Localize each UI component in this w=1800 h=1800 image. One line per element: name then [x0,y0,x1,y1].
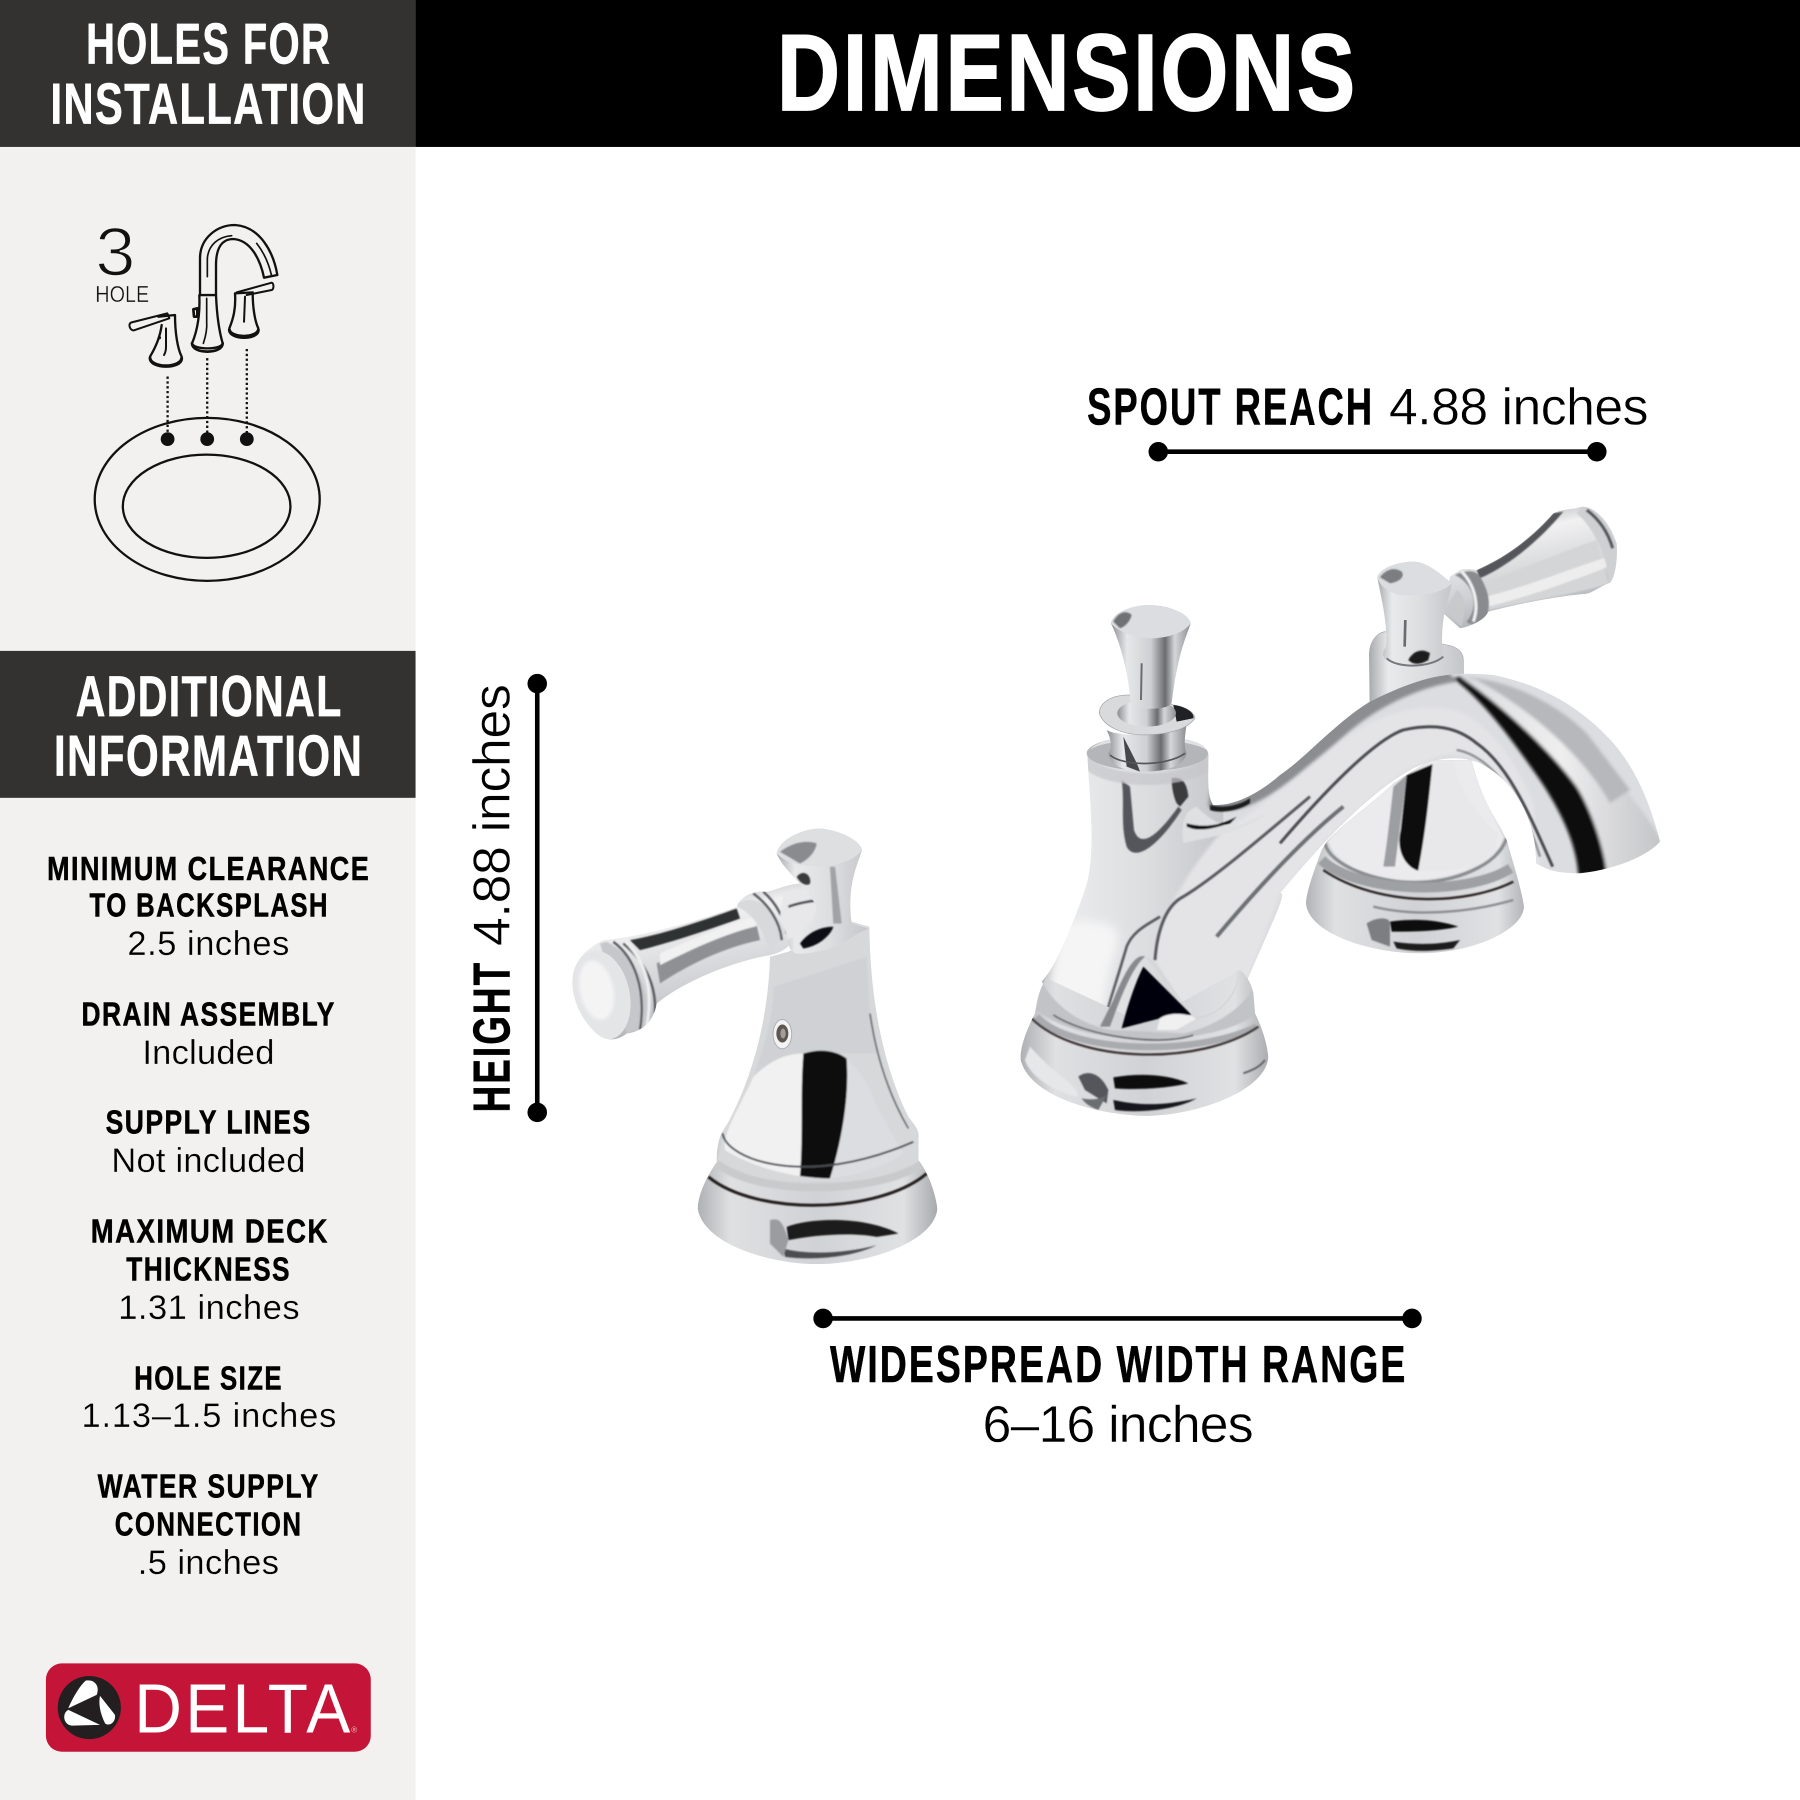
dimension: widespread width range: 6–16 inches [983,1395,1254,1453]
spec: water supply connection: CONNECTION [115,1506,302,1543]
logo: delta [46,1663,371,1752]
back handle block, cap and lever [1369,503,1620,703]
front handle body and base [693,920,940,1267]
spec: water supply connection [98,1469,320,1582]
spec: drain assembly: DRAIN ASSEMBLY [82,997,336,1034]
faucet: center base [1017,956,1273,1120]
faucet: back handle [1300,503,1620,960]
spec: minimum clearance: 2.5 inches [127,925,289,963]
dimension: spout reach: SPOUT REACH [1087,378,1374,436]
dimension: widespread width range [813,1309,1422,1453]
spec: minimum clearance: TO BACKSPLASH [90,888,329,925]
back handle base and bell [1306,760,1524,954]
main title: dimensions [416,0,1800,147]
lower cone [1107,723,1187,772]
dimension: height: 4.88 inches [463,684,521,946]
spec: drain assembly: Included [142,1034,274,1072]
logo: delta: ® [351,1725,357,1734]
spec: hole size: 1.13–1.5 inches [82,1397,336,1435]
heading: holes for installation: HOLES FOR [86,13,331,77]
heading: additional information [0,651,416,798]
dimension: height [463,674,547,1122]
spec: maximum deck thickness: 1.31 inches [118,1289,300,1327]
dark triangle reflection [1100,956,1197,1030]
spec: hole size: HOLE SIZE [134,1361,283,1398]
faucet: center spout [1037,605,1670,1043]
flange [1099,695,1195,735]
faucet: front handle [565,828,940,1267]
spec: supply lines: Not included [111,1142,305,1180]
heading: holes for installation: INSTALLATION [51,72,367,136]
spec: maximum deck thickness: THICKNESS [126,1252,291,1289]
spec: water supply connection: .5 inches [138,1544,279,1582]
heading: holes for installation [0,0,416,147]
spout silhouette and reflections [1037,670,1670,1043]
lift rod knob [1111,605,1191,709]
dimension: height: HEIGHT [463,961,521,1112]
rim [1087,736,1208,771]
spec: hole size [82,1361,336,1435]
spec: maximum deck thickness: MAXIMUM DECK [91,1214,329,1251]
dimension: widespread width range: WIDESPREAD WIDTH RANGE [830,1335,1407,1393]
heading: additional information: INFORMATION [54,724,363,788]
front lever [572,884,816,1040]
sidebar panel [0,147,416,1800]
heading: additional information: ADDITIONAL [76,665,343,729]
logo: delta: DELTA [134,1669,354,1747]
spec: minimum clearance: MINIMUM CLEARANCE [47,851,370,888]
icon: three hole sink diagram: 3 [95,214,135,291]
main title: dimensions: DIMENSIONS [777,12,1358,134]
spec: drain assembly [82,997,336,1072]
dimension: spout reach: 4.88 inches [1389,378,1648,436]
spec: water supply connection: WATER SUPPLY [98,1469,320,1506]
dimension: spout reach [1087,378,1648,461]
spec: minimum clearance [47,851,370,963]
spec: maximum deck thickness [91,1214,329,1327]
front handle cap [777,828,868,954]
icon: three hole sink diagram: HOLE [95,281,149,307]
spec: supply lines: SUPPLY LINES [106,1105,312,1142]
spec: supply lines [106,1105,312,1180]
icon: three hole sink diagram [95,214,320,581]
